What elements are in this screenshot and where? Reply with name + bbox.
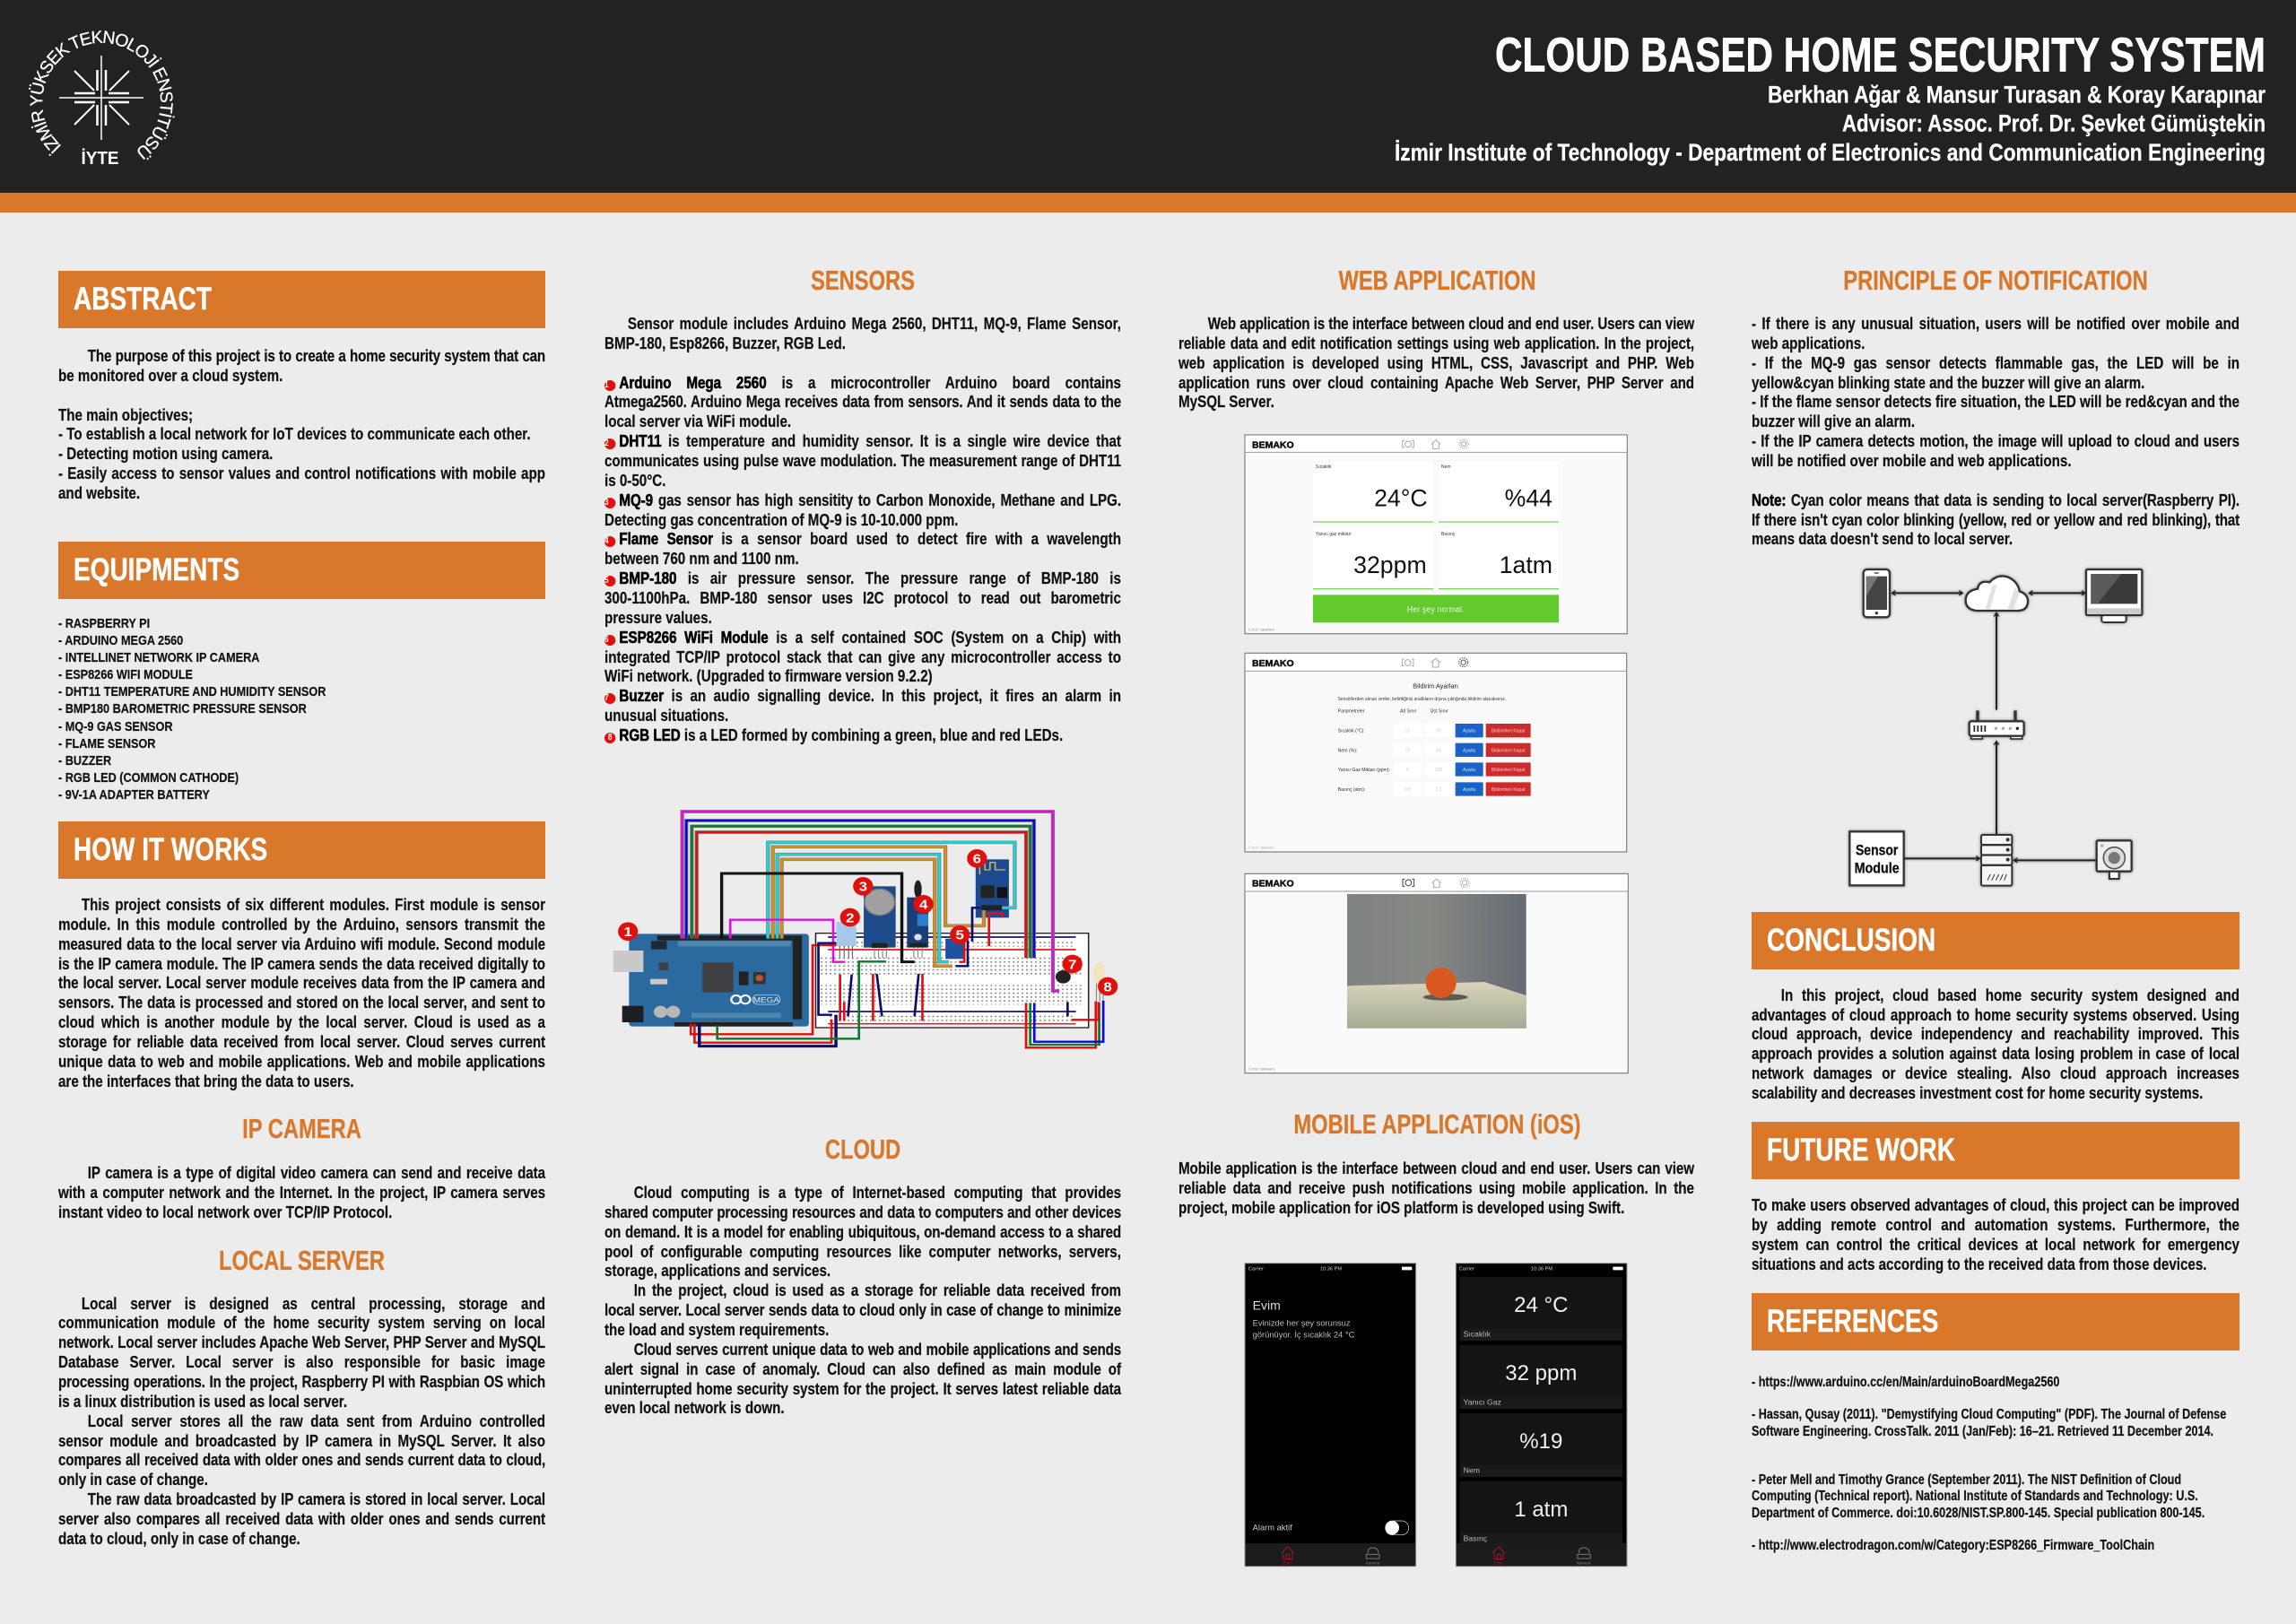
screenshot: notification settings: Ayarla — [1463, 787, 1475, 793]
heading: web application: WEB APPLICATION — [1338, 265, 1536, 296]
phone: sensor values — [1456, 1264, 1627, 1567]
text: how it works: This project consists of six different modules. First module is sensor — [82, 895, 545, 914]
icon: server — [1981, 835, 2012, 886]
orange header stripe — [0, 193, 2296, 213]
heading: cloud: CLOUD — [825, 1133, 900, 1165]
text: abstract — [58, 346, 545, 502]
phone: sensor values: Carrier — [1459, 1266, 1474, 1272]
text: sensors: integrated TCP/IP protocol stack that can give any microcontroller access to — [604, 647, 1121, 666]
phone: sensor values: Evim — [1494, 1560, 1503, 1565]
text: web application: MySQL Server. — [1178, 392, 1274, 411]
text: principle of notification: yellow&cyan blinking state and the buzzer will give an alarm. — [1752, 373, 2144, 392]
icon: cloud — [1966, 576, 2028, 611]
text: future work: system can control the critical devices at local network for emergency — [1752, 1235, 2239, 1254]
text: sensors: 3 — [604, 498, 608, 508]
text: sensors: Detecting gas concentration of MQ-9 is 10-10.000 ppm. — [604, 510, 959, 529]
phone: sensor values: 24 °C — [1514, 1293, 1568, 1317]
phone: sensor values: %19 — [1519, 1429, 1562, 1454]
text: cloud — [604, 1183, 1121, 1418]
heading: equipments — [58, 542, 545, 599]
phone: home screen: Carrier — [1248, 1266, 1264, 1272]
phone: sensor values: Kamera — [1577, 1560, 1591, 1565]
icon: phone — [1864, 569, 1890, 617]
screenshot: notification settings: Ayarla — [1463, 729, 1475, 734]
heading: references: REFERENCES — [1767, 1304, 1938, 1339]
heading: principle of notification: PRINCIPLE OF NOTIFICATION — [1843, 265, 2148, 296]
screenshot: notification settings: Bildirimleri Kapat — [1492, 748, 1526, 753]
text: cloud: local server. Local server sends data to cloud only in case of change to minimize — [604, 1300, 1121, 1319]
logo: IYTE emblem: İZMİR YÜKSEK TEKNOLOJİ ENSTİTÜSÜ — [29, 30, 175, 160]
text: local server: is a linux distribution is used as local server. — [58, 1392, 347, 1411]
text: future work: situations and acts according to the received data from those devices. — [1752, 1255, 2207, 1273]
text: references: - Peter Mell and Timothy Grance (September 2011). The NIST Definition of Cloud — [1752, 1472, 2181, 1488]
screenshot: dashboard: Her şey normal. — [1407, 604, 1464, 613]
number markers — [618, 849, 1118, 995]
heading: abstract: ABSTRACT — [74, 282, 212, 317]
text: sensors: BMP-180 is air pressure sensor. The pressure range of BMP-180 is — [619, 569, 1121, 587]
text: how it works: sensors. The data is processed and stored on the local server, and sent to — [58, 993, 545, 1012]
text: conclusion: scalability and decreases investment cost for home security systems. — [1752, 1083, 2203, 1102]
text: sensors: communicates using pulse wave modulation. The measurement range of DHT11 — [604, 451, 1121, 470]
text: ip camera: instant video to local network over TCP/IP Protocol. — [58, 1203, 392, 1221]
text: sensors: DHT11 is temperature and humidity sensor. It is a single wire device that — [619, 431, 1121, 450]
text: sensors: 2 — [604, 439, 609, 448]
screenshot: notification settings — [1245, 653, 1627, 852]
text: local server: Local server stores all the raw data sent from Arduino controlled — [88, 1411, 545, 1430]
text: sensors: RGB LED is a LED formed by combining a green, blue and red LEDs. — [619, 725, 1063, 744]
number markers: 2 — [846, 911, 855, 925]
text: mobile application — [1178, 1159, 1694, 1218]
text: equipment list: - BMP180 BAROMETRIC PRESSURE SENSOR — [58, 701, 307, 716]
text: local server: The raw data broadcasted by IP camera is stored in local server. Local — [88, 1489, 545, 1508]
heading: conclusion: CONCLUSION — [1767, 923, 1935, 958]
icon: router — [1970, 710, 2024, 739]
text: principle of notification: - If the flame sensor detects fire situation, the LED will be red&cyan and the — [1752, 392, 2239, 411]
text: references: - http://www.electrodragon.com/w/Category:ESP8266_Firmware_ToolChain — [1752, 1538, 2154, 1553]
text: equipment list: - ESP8266 WIFI MODULE — [58, 667, 193, 682]
text: abstract: be monitored over a cloud system. — [58, 366, 283, 385]
heading: references — [1752, 1293, 2239, 1350]
icon: sensor module: Module — [1855, 860, 1900, 877]
web screenshots: dashboard and settings — [1229, 421, 1650, 870]
icon: monitor — [2086, 569, 2142, 622]
phone: home screen — [1245, 1264, 1416, 1567]
text: sensors: Arduino Mega 2560 is a microcontroller Arduino board contains — [619, 373, 1121, 392]
text: equipment list: - INTELLINET NETWORK IP CAMERA — [58, 650, 259, 665]
arrows — [1892, 591, 2096, 863]
text: references: Computing (Technical report). National Institute of Standards and Technology: U.S. — [1752, 1489, 2198, 1504]
text: mobile application: project, mobile application for iOS platform is developed using Swift. — [1178, 1198, 1624, 1217]
screenshot: dashboard: 1atm — [1500, 551, 1552, 578]
text: local server: sensor module and broadcasted by IP camera in MySQL Server. It also — [58, 1431, 545, 1450]
text: how it works: measured data to the local server via Arduino wifi module. Second module — [58, 934, 545, 953]
text: principle of notification: - If the IP camera detects motion, the image will upload to cloud and users — [1752, 431, 2239, 450]
phone: sensor values: Sıcaklık — [1464, 1330, 1492, 1339]
number markers: 7 — [1068, 958, 1077, 972]
text: equipment list: - FLAME SENSOR — [58, 736, 155, 751]
icon: sensor module: Sensor — [1856, 841, 1899, 858]
screenshot: notification settings: 0 — [1406, 768, 1409, 773]
title — [1395, 29, 2266, 166]
text: sensors: Atmega2560. Arduino Mega receives data from sensors. And it sends data to the — [604, 392, 1121, 411]
text: future work — [1752, 1195, 2239, 1273]
text: sensors: Buzzer is an audio signalling device. In this project, it fires an alarm in — [619, 686, 1121, 705]
text: sensors: 5 — [604, 576, 609, 586]
text: conclusion: In this project, cloud based home security system designed and — [1781, 986, 2239, 1004]
chart: system architecture diagram — [1821, 556, 2179, 897]
screenshot: dashboard: Basınç — [1441, 532, 1456, 537]
text: sensors: 8 — [608, 733, 612, 743]
screenshot: notification settings: Sıcaklık (°C): — [1338, 729, 1365, 734]
text: equipment list: - RASPBERRY PI — [58, 616, 150, 631]
text: principle of notification: Note: Cyan color means that data is sending to local server(Raspberry PI). — [1752, 491, 2239, 509]
text: cloud: pool of configurable computing resources like computer networks, servers, — [604, 1242, 1121, 1261]
text: sensors — [604, 314, 1121, 745]
text: how it works: are the interfaces that bring the data to users. — [58, 1072, 354, 1090]
number markers: 3 — [859, 881, 867, 894]
heading: future work: FUTURE WORK — [1767, 1133, 1955, 1168]
text: references: - https://www.arduino.cc/en/Main/arduinoBoardMega2560 — [1752, 1375, 2059, 1390]
arduino mega board: MEGA — [753, 996, 780, 1004]
text: how it works: is the IP camera module. The IP camera sends the data received digitally to — [58, 954, 545, 973]
breadboard — [815, 934, 1089, 1028]
screenshot: dashboard: Nem — [1441, 465, 1451, 470]
text: mobile application: Mobile application is the interface between cloud and end user. Users can view — [1178, 1159, 1694, 1177]
text: sensors: 300-1100hPa. BMP-180 sensor uses I2C protocol to read out barometric — [604, 588, 1121, 607]
phone: home screen: Evim — [1283, 1560, 1292, 1565]
screenshot: notification settings: Parametreler — [1338, 709, 1365, 715]
sensor modules — [836, 859, 1105, 1002]
phone: sensor values: 32 ppm — [1505, 1361, 1577, 1385]
text: web application — [1178, 314, 1694, 412]
text: local server: only in case of change. — [58, 1470, 208, 1489]
heading: ip camera: IP CAMERA — [242, 1113, 361, 1144]
text: web application: Web application is the interface between cloud and end user. Users can view — [1208, 314, 1694, 333]
text: references: - Hassan, Qusay (2011). "Demystifying Cloud Computing" (PDF). The Journal of Defense — [1752, 1407, 2226, 1422]
text: conclusion: advantages of cloud approach to home security systems observed. Using — [1752, 1005, 2239, 1024]
heading: mobile application: MOBILE APPLICATION (iOS) — [1293, 1108, 1581, 1140]
screenshot: notification settings: Yanıcı Gaz Miktarı (ppm): — [1338, 768, 1390, 773]
text: equipment list: - RGB LED (COMMON CATHODE) — [58, 770, 239, 786]
text: principle of notification — [1752, 314, 2239, 549]
text: sensors: Sensor module includes Arduino Mega 2560, DHT11, MQ-9, Flame Sensor, — [628, 314, 1121, 333]
arduino mega board — [613, 934, 809, 1027]
text: local server: Database Server. Local server is also responsible for basic image — [58, 1352, 545, 1371]
text: ip camera: IP camera is a type of digital video camera can send and receive data — [88, 1163, 545, 1182]
text: sensors: WiFi network. (Upgraded to firmware version 9.2.2) — [604, 666, 933, 685]
screenshot: dashboard: Yanıcı gaz miktarı — [1316, 532, 1352, 537]
text: how it works: the local server. Local server module receives data from the IP camera and — [58, 973, 545, 992]
text: principle of notification: web applications. — [1752, 334, 1865, 352]
screenshot: dashboard: BEMAKO — [1252, 440, 1294, 450]
text: sensors: local server via WiFi module. — [604, 412, 791, 430]
text: local server: processing operations. In the project, Raspberry PI with Raspbian OS which — [58, 1372, 545, 1391]
text: cloud: shared computer processing resources and data to computers and other devices — [604, 1203, 1121, 1221]
wires — [683, 812, 1103, 1047]
text: sensors: BMP-180, Esp8266, Buzzer, RGB Led. — [604, 334, 846, 352]
text: how it works: unique data to web and mobile applications. Web and mobile applications — [58, 1052, 545, 1071]
screenshot: dashboard: %44 — [1505, 484, 1552, 511]
heading: local server: LOCAL SERVER — [219, 1245, 385, 1276]
screenshot: dashboard: © 2017, BEMAKO — [1248, 628, 1274, 631]
screenshot: dashboard: 24°C — [1374, 484, 1428, 511]
heading: conclusion — [1752, 912, 2239, 969]
screenshot: notification settings: 1.2 — [1436, 787, 1442, 793]
screenshot: notification settings: 35 — [1436, 729, 1441, 734]
chart: circuit wiring diagram — [592, 789, 1130, 1076]
text: abstract: - To establish a local network for IoT devices to communicate each other. — [58, 424, 531, 443]
text: mobile application: reliable data and receive push notifications using mobile application. In the — [1178, 1178, 1694, 1197]
text: sensors: 7 — [604, 693, 609, 703]
mobile screenshots — [1229, 1246, 1650, 1578]
screenshot: notification settings: 15 — [1405, 729, 1410, 734]
text: principle of notification: buzzer will give an alarm. — [1752, 412, 1915, 430]
screenshot: notification settings: Bildirimleri Kapat — [1492, 787, 1526, 793]
text: cloud: on demand. It is a model for enabling ubiquitous, on-demand access to a shared — [604, 1222, 1121, 1241]
screenshot: notification settings: 200 — [1435, 768, 1442, 773]
heading: abstract — [58, 271, 545, 328]
screenshot: dashboard: Sıcaklık — [1316, 465, 1332, 470]
text: how it works: module. In this module controlled by the Arduino, sensors transmit the — [58, 915, 545, 934]
text: abstract: - Detecting motion using camera. — [58, 444, 273, 463]
screenshot: notification settings: Ayarla — [1463, 768, 1475, 773]
phone: home screen: Alarm aktif — [1253, 1524, 1292, 1533]
screenshot: camera view: BEMAKO — [1252, 879, 1294, 889]
phone: home screen: 10:36 PM — [1320, 1266, 1342, 1272]
phone: home screen: Evim — [1253, 1298, 1281, 1313]
text: equipment list: - 9V-1A ADAPTER BATTERY — [58, 787, 210, 803]
text: sensors: Flame Sensor is a sensor board used to detect fire with a wavelength — [619, 529, 1121, 548]
text: cloud: storage, applications and services. — [604, 1261, 831, 1280]
text: cloud: the load and system requirements. — [604, 1320, 829, 1339]
text: abstract: The purpose of this project is to create a home security system that can — [88, 346, 545, 365]
text: principle of notification: will be notified over mobile and web applications. — [1752, 451, 2072, 470]
screenshot: dashboard — [1245, 435, 1627, 634]
phone: home screen: görünüyor. İç sıcaklık 24 °C — [1253, 1331, 1355, 1340]
heading: future work — [1752, 1122, 2239, 1179]
phone: sensor values: Nem — [1464, 1465, 1480, 1474]
text: abstract: and website. — [58, 483, 140, 502]
text: ip camera — [58, 1163, 545, 1222]
text: conclusion: approach provides a solution against data losing problem in case of local — [1752, 1044, 2239, 1063]
text: local server: Local server is designed as central processing, storage and — [82, 1293, 545, 1313]
text: local server — [58, 1293, 545, 1549]
screenshot: notification settings: Nem (%): — [1338, 748, 1357, 753]
text: how it works: storage for reliable data received from local server. Cloud serves current — [58, 1032, 545, 1051]
text: conclusion: cloud approach, device independency and reachability improved. This — [1752, 1024, 2239, 1043]
screenshot: notification settings: © 2017, BEMAKO — [1248, 847, 1274, 850]
text: cloud: Cloud serves current unique data to web and mobile applications and sends — [634, 1340, 1121, 1359]
text: references — [1752, 1375, 2239, 1554]
text: how it works — [58, 895, 545, 1090]
screenshot: dashboard: 32ppm — [1353, 551, 1427, 578]
text: conclusion — [1752, 986, 2239, 1103]
text: abstract: - Easily access to sensor values and control notifications with mobile app — [58, 464, 545, 482]
text: ip camera: with a computer network and the Internet. In the project, IP camera serves — [58, 1183, 545, 1202]
phone: sensor values: Yanıcı Gaz — [1464, 1398, 1501, 1407]
phone: sensor values: 1 atm — [1514, 1498, 1568, 1522]
number markers: 4 — [919, 899, 928, 912]
screenshot: notification settings: Üst Sınır — [1431, 708, 1448, 715]
text: principle of notification: - If the MQ-9 gas sensor detects flammable gas, the LED will be in — [1752, 353, 2239, 372]
screenshot: notification settings: Bildirimleri Kapat — [1492, 729, 1526, 734]
logo: IYTE emblem: İYTE — [81, 148, 118, 169]
screenshot: notification settings: Bildirimleri Kapat — [1492, 768, 1526, 773]
text: equipment list: - BUZZER — [58, 753, 111, 769]
number markers: 5 — [956, 929, 964, 942]
phone: sensor values: 10:36 PM — [1531, 1266, 1552, 1272]
text: cloud: In the project, cloud is used as a storage for reliable data received from — [634, 1281, 1121, 1299]
text: references: Software Engineering. CrossTalk. 2011 (Jan/Feb): 16–21. Retrieved 11 December 2014. — [1752, 1424, 2213, 1439]
screenshot: camera view: © 2017, BEMAKO — [1248, 1067, 1274, 1071]
text: equipment list — [58, 616, 326, 803]
text: cloud: uninterrupted home security system for the project. It serves latest reliable data — [604, 1379, 1121, 1398]
text: cloud: alert signal in case of anomaly. Cloud can also defined as main module of — [604, 1359, 1121, 1378]
phone: home screen: Evinizde her şey sorunsuz — [1253, 1319, 1351, 1328]
text: local server: compares all received data with older ones and sends current data to cloud, — [58, 1450, 545, 1469]
text: sensors: 6 — [604, 635, 609, 645]
text: how it works: cloud which is another module by the local server. Cloud is used as a — [58, 1012, 545, 1031]
header band — [0, 0, 2296, 193]
screenshot: notification settings: BEMAKO — [1252, 659, 1294, 669]
heading: how it works: HOW IT WORKS — [74, 832, 267, 867]
text: sensors: between 760 nm and 1100 nm. — [604, 549, 799, 568]
screenshot: notification settings: Alt Sınır — [1400, 709, 1417, 715]
text: sensors: 1 — [604, 380, 609, 390]
text: abstract: The main objectives; — [58, 405, 193, 424]
phone: sensor values: Basınç — [1464, 1533, 1488, 1542]
text: web application: application runs over cloud containing Apache Web Server, PHP Server and — [1178, 373, 1694, 392]
text: equipment list: - ARDUINO MEGA 2560 — [58, 633, 183, 648]
text: local server: network. Local server includes Apache Web Server, PHP Server and MySQL — [58, 1333, 545, 1351]
phone: home screen: Kamera — [1366, 1560, 1380, 1565]
text: local server: data to cloud, only in case of change. — [58, 1529, 300, 1548]
text: references: Department of Commerce. doi:10.6028/NIST.SP.800-145. Special publication 800-145. — [1752, 1505, 2205, 1521]
number markers: 1 — [623, 925, 632, 940]
text: local server: server also compares all received data with older ones and sends current — [58, 1509, 545, 1528]
text: cloud: Cloud computing is a type of Internet-based computing that provides — [634, 1183, 1121, 1202]
text: web application: web application is developed using HTML, CSS, Javascript and PHP. Web — [1178, 353, 1694, 372]
screenshot: notification settings: 60 — [1436, 748, 1441, 753]
text: sensors: 4 — [604, 536, 609, 546]
number markers: 6 — [973, 853, 981, 866]
text: equipment list: - MQ-9 GAS SENSOR — [58, 719, 172, 734]
screenshot: camera view — [1229, 861, 1650, 1085]
text: local server: communication module of the home security system serving on local — [58, 1313, 545, 1332]
screenshot: notification settings: Basınç (atm): — [1338, 787, 1365, 793]
heading: how it works — [58, 821, 545, 879]
screenshot: notification settings: 0.8 — [1405, 787, 1411, 793]
text: sensors: unusual situations. — [604, 706, 728, 725]
text: equipment list: - DHT11 TEMPERATURE AND HUMIDITY SENSOR — [58, 684, 326, 699]
heading: sensors: SENSORS — [811, 265, 915, 296]
icon: sensor module — [1849, 831, 1904, 885]
text: conclusion: network damages or device stealing. Also cloud approach increases — [1752, 1064, 2239, 1082]
icon: ip camera — [2097, 840, 2132, 879]
text: cloud: even local network is down. — [604, 1398, 785, 1417]
screenshot: notification settings: Bildirim Ayarları — [1413, 682, 1458, 690]
screenshot: notification settings: Sensörlerden alınan veriler, belirttiğiniz aralıkların dışına çıktığında bildirim alacaksınız. — [1338, 697, 1506, 702]
text: web application: reliable data and edit notification settings using web application. In the project, — [1178, 334, 1694, 352]
text: future work: by adding remote control and automation systems. Furthermore, the — [1752, 1215, 2239, 1234]
screenshot: notification settings: 10 — [1405, 748, 1410, 753]
text: future work: To make users observed advantages of cloud, this project can be improved — [1752, 1195, 2239, 1214]
text: sensors: is 0-50°C. — [604, 471, 665, 490]
text: sensors: ESP8266 WiFi Module is a self contained SOC (System on a Chip) with — [619, 628, 1121, 647]
number markers: 8 — [1103, 980, 1112, 994]
text: sensors: pressure values. — [604, 608, 712, 627]
screenshot: notification settings: Ayarla — [1463, 748, 1475, 753]
text: principle of notification: If there isn't cyan color blinking (yellow, red or yellow and red blinking), that — [1752, 510, 2239, 529]
text: sensors: MQ-9 gas sensor has high sensitity to Carbon Monoxide, Methane and LPG. — [619, 491, 1121, 509]
text: principle of notification: - If there is any unusual situation, users will be notified over mobile and — [1752, 314, 2239, 333]
heading: equipments: EQUIPMENTS — [74, 552, 239, 587]
text: principle of notification: means data doesn't send to local server. — [1752, 529, 2013, 548]
